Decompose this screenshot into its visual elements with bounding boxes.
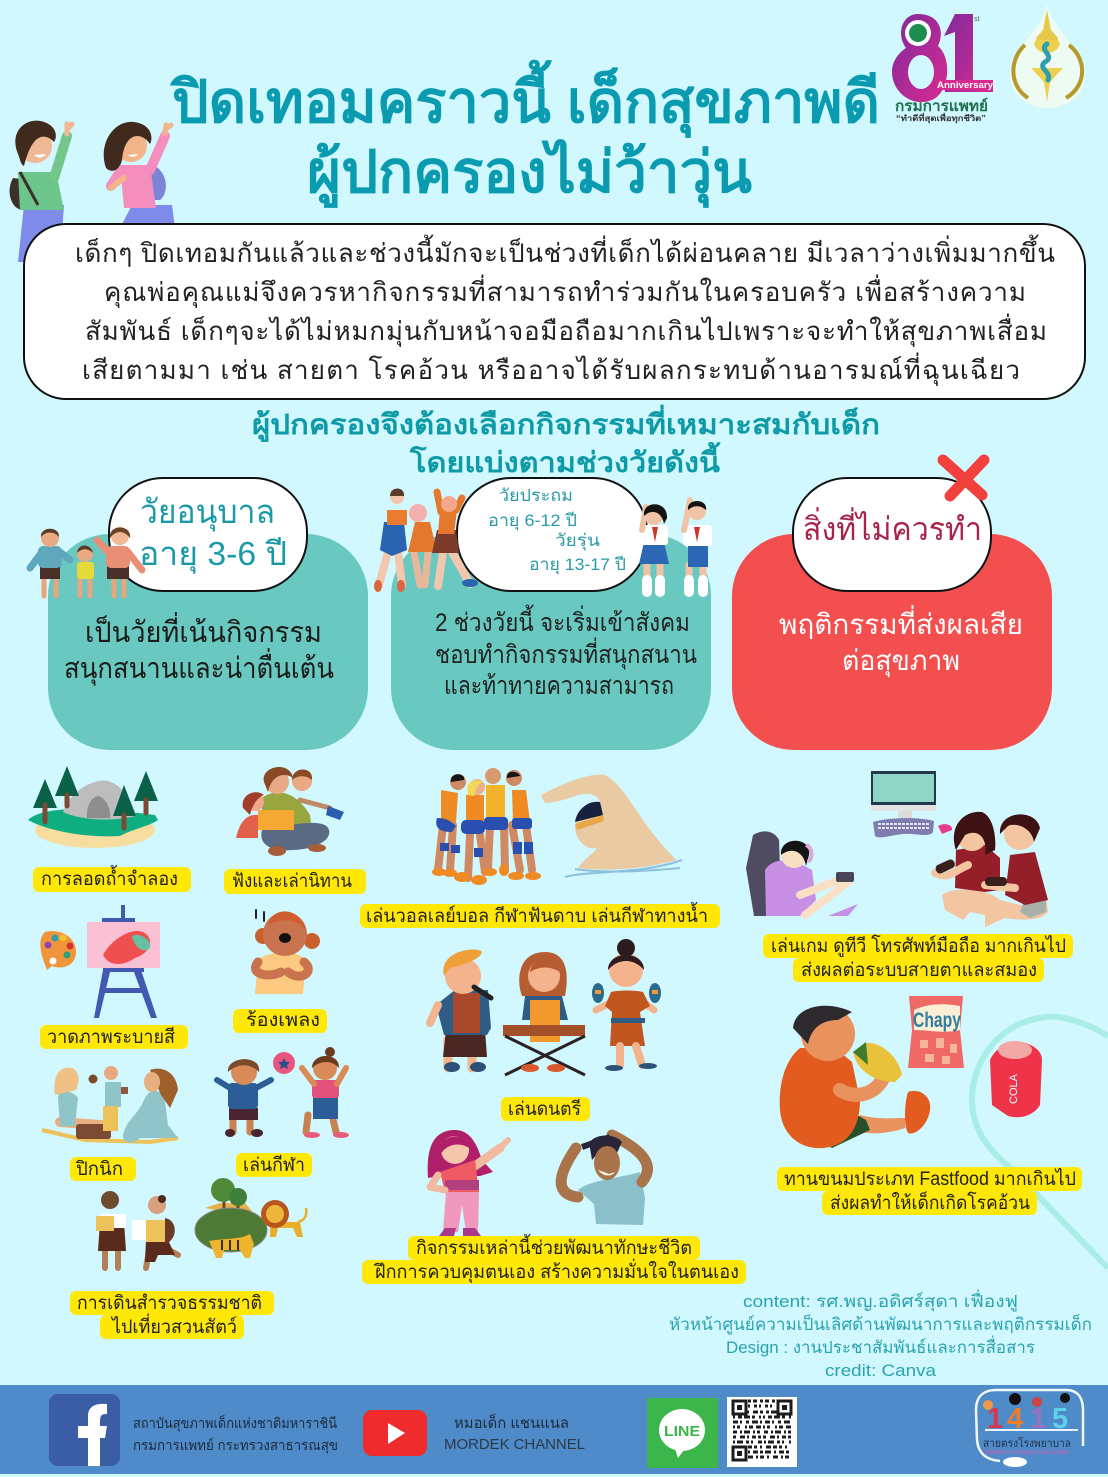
- subheading: [252, 404, 880, 478]
- credits text: Design : งานประชาสัมพันธ์และการสื่อสาร: [726, 1335, 1035, 1357]
- logo: 1415 hotline: 5: [1052, 1403, 1068, 1435]
- label: fast food: ทานขนมประเภท Fastfood มากเกินไป: [784, 1168, 1076, 1190]
- icon: line: LINE: [664, 1423, 700, 1440]
- label: cave: การลอดถ้ำจำลอง: [41, 865, 178, 890]
- logo: 81st anniversary department of medical services: กรมการแพทย์: [895, 97, 988, 115]
- label: music: เล่นดนตรี: [508, 1098, 581, 1120]
- credits text: หัวหน้าศูนย์ความเป็นเลิศด้านพัฒนาการและพฤติกรรมเด็ก: [669, 1313, 1092, 1335]
- logo: 1415 hotline: 4: [1007, 1403, 1023, 1435]
- illustration: paint palette and easel: [40, 905, 160, 1018]
- illustration: three small children: [30, 527, 142, 596]
- panel: what not to do: พฤติกรรมที่ส่งผลเสีย: [779, 605, 1023, 640]
- pill: things not to do: [793, 478, 991, 591]
- illustration: cola can: [990, 1041, 1042, 1117]
- credits text: content: รศ.พญ.อดิศร์สุดา เฟื่องฟู: [743, 1289, 1018, 1312]
- logo: 81st anniversary department of medical services: “ทำดีที่สุดเพื่อทุกชีวิต”: [896, 112, 986, 124]
- decorative magnifier ring: [972, 1017, 1108, 1268]
- title: [169, 60, 880, 209]
- logo: 1415 hotline: สายตรงโรงพยาบาล: [983, 1436, 1071, 1450]
- illustration: group of teenagers: [374, 488, 478, 592]
- logo: royal college teardrop emblem: [1010, 4, 1085, 108]
- intro text box: สัมพันธ์ เด็กๆจะได้ไม่หมกมุ่นกับหน้าจอมือถือมากเกินไปเพราะจะทำให้สุขภาพเสื่อม: [85, 313, 1047, 347]
- subheading: โดยแบ่งตามช่วงวัยดังนี้: [409, 441, 721, 478]
- logo: 81st anniversary department of medical services: st: [974, 16, 980, 23]
- logo: 1415 hotline: [976, 1390, 1083, 1467]
- label: sports: เล่นกีฬา: [243, 1154, 305, 1176]
- logo: 1415 hotline: 1: [987, 1403, 1003, 1435]
- pill: primary and teen age ranges: วัยรุ่น: [555, 531, 600, 551]
- illustration: singing girl: [255, 910, 320, 994]
- panel: primary and teen ages: และท้าทายความสามารถ: [444, 672, 674, 700]
- pill: things not to do: สิ่งที่ไม่ควรทำ: [803, 507, 982, 547]
- illustration: cave and forest island: [28, 766, 158, 848]
- intro text box: เด็กๆ ปิดเทอมกันแล้วและช่วงนี้มักจะเป็นช่วงที่เด็กได้ผ่อนคลาย มีเวลาว่างเพิ่มมากขึ้น: [75, 234, 1055, 268]
- qr code: [727, 1397, 797, 1467]
- illustration: confident girl: [428, 1130, 508, 1236]
- label: picnic: ปิกนิก: [75, 1159, 123, 1180]
- label: volleyball and water sports: เล่นวอลเลย์บอล กีฬาฟันดาบ เล่นกีฬาทางน้ำ: [366, 902, 708, 927]
- text: channel name: หมอเด็ก แชนแนล: [454, 1413, 569, 1432]
- label: life skills: กิจกรรมเหล่านี้ช่วยพัฒนาทักษะชีวิต: [416, 1234, 692, 1259]
- logo: 81st anniversary department of medical services: [892, 14, 993, 124]
- label: fast food: [777, 1167, 1082, 1215]
- pill: kindergarten age: [109, 478, 307, 591]
- icon: youtube: [363, 1410, 427, 1456]
- label: picnic: [70, 1157, 136, 1181]
- logo: 81st anniversary department of medical services: Anniversary: [937, 80, 993, 90]
- label: nature walk and zoo: การเดินสำรวจธรรมชาติ: [77, 1293, 262, 1314]
- illustration: swimmer: [541, 775, 682, 877]
- icon: line: [647, 1398, 718, 1468]
- icon: red cross: [943, 460, 984, 496]
- illustration: father reading to children: [236, 767, 344, 856]
- label: painting: วาดภาพระบายสี: [47, 1026, 175, 1048]
- illustration: children playing ball: [217, 1047, 349, 1138]
- label: storytelling: ฟังและเล่านิทาน: [232, 871, 352, 892]
- label: life skills: ฝึกการควบคุมตนเอง สร้างความมั่นใจในตนเอง: [373, 1258, 739, 1284]
- pill: primary and teen age ranges: วัยประถม: [499, 486, 573, 505]
- intro text box: [24, 224, 1085, 399]
- label: singing: [233, 1009, 327, 1033]
- illustration: volleyball team: [432, 768, 541, 885]
- illustration: overweight boy eating: [780, 1006, 930, 1148]
- illustration: children playing music: [430, 939, 661, 1075]
- illustration: zoo animals: [195, 1178, 306, 1258]
- intro text box: คุณพ่อคุณแม่จึงควรหากิจกรรมที่สามารถทำร่วมกันในครอบครัว เพื่อสร้างความ: [104, 274, 1026, 308]
- title: ผู้ปกครองไม่ว้าวุ่น: [307, 139, 752, 209]
- label: nature walk and zoo: [70, 1291, 274, 1339]
- text: hospital name: กรมการแพทย์ กระทรวงสาธารณสุข: [133, 1437, 338, 1454]
- label: fast food: ส่งผลทำให้เด็กเกิดโรคอ้วน: [830, 1190, 1030, 1214]
- panel: what not to do: [732, 478, 1052, 750]
- illustration: students in uniform: [639, 500, 712, 592]
- illustration: children exploring nature: [96, 1191, 178, 1268]
- illustration: man combing hair: [561, 1135, 647, 1225]
- panel: primary and teen ages: 2 ช่วงวัยนี้ จะเริ่มเข้าสังคม: [435, 604, 690, 637]
- illustration: family picnic: [42, 1066, 178, 1142]
- illustration: chips packet: [908, 996, 964, 1068]
- panel: primary and teen ages: [391, 478, 711, 750]
- pill: primary and teen age ranges: [457, 478, 647, 591]
- illustration: computer and keyboard: [871, 771, 936, 837]
- panel: what not to do: ต่อสุขภาพ: [842, 645, 960, 678]
- credits text: [669, 1289, 1092, 1380]
- illustration: chips packet: Chapy: [913, 1009, 961, 1032]
- label: singing: ร้องเพลง: [246, 1010, 320, 1031]
- label: nature walk and zoo: ไปเที่ยวสวนสัตว์: [110, 1313, 237, 1338]
- illustration: girl on gaming chair: [746, 831, 858, 916]
- title: ปิดเทอมคราวนี้ เด็กสุขภาพดี: [169, 60, 880, 139]
- panel: kindergarten: เป็นวัยที่เน้นกิจกรรม: [85, 612, 322, 649]
- text: hospital name: [133, 1414, 338, 1454]
- illustration: waving boy with backpack: [10, 121, 72, 262]
- subheading: ผู้ปกครองจึงต้องเลือกกิจกรรมที่เหมาะสมกับเด็ก: [252, 404, 880, 442]
- label: games and screens: [763, 934, 1073, 982]
- illustration: waving girl with backpack: [104, 122, 175, 228]
- panel: kindergarten: [48, 478, 368, 750]
- text: hospital name: สถาบันสุขภาพเด็กแห่งชาติมหาราชินี: [133, 1414, 337, 1432]
- panel: primary and teen ages: ชอบทำกิจกรรมที่สนุกสนาน: [435, 637, 697, 670]
- text: channel name: MORDEK CHANNEL: [444, 1436, 585, 1453]
- text: channel name: [444, 1413, 585, 1453]
- intro text box: เสียตามมา เช่น สายตา โรคอ้วน หรืออาจได้รับผลกระทบด้านอารมณ์ที่ฉุนเฉียว: [82, 352, 1020, 386]
- label: life skills: [362, 1234, 746, 1284]
- pill: kindergarten age: อายุ 3-6 ปี: [139, 535, 287, 574]
- label: games and screens: ส่งผลต่อระบบสายตาและสมอง: [801, 960, 1037, 981]
- pill: primary and teen age ranges: อายุ 13-17 ปี: [529, 555, 626, 575]
- label: games and screens: เล่นเกม ดูทีวี โทรศัพท์มือถือ มากเกินไป: [771, 934, 1066, 957]
- icon: facebook: [49, 1394, 120, 1466]
- illustration: children playing games: [934, 812, 1048, 927]
- panel: kindergarten: สนุกสนานและน่าตื่นเต้น: [64, 648, 334, 686]
- logo: 1415 hotline: Children's Hospital Call Center: [983, 1450, 1069, 1456]
- pill: primary and teen age ranges: อายุ 6-12 ปี: [488, 511, 577, 531]
- logo: 1415 hotline: 1: [1030, 1403, 1046, 1435]
- illustration: cola can: COLA: [1008, 1073, 1020, 1104]
- credits text: credit: Canva: [825, 1361, 937, 1380]
- footer bar: [0, 1385, 1108, 1474]
- pill: kindergarten age: วัยอนุบาล: [140, 493, 275, 532]
